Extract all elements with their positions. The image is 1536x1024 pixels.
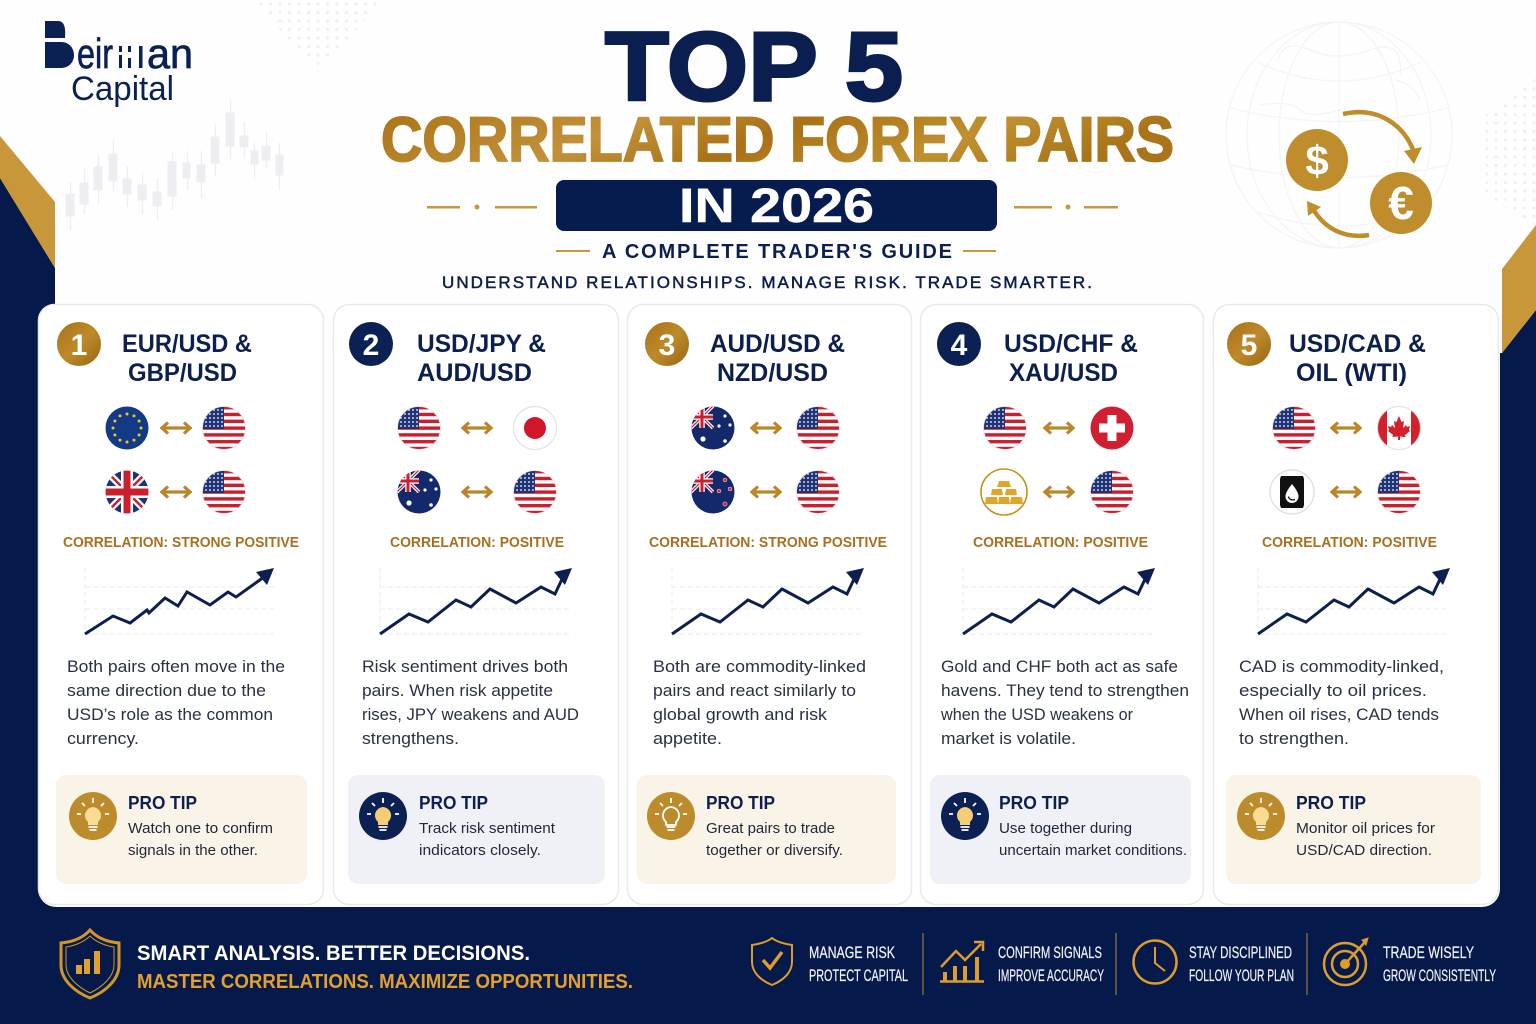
icon: rising bars xyxy=(940,942,984,982)
card heading xyxy=(710,330,845,387)
dot pattern right xyxy=(1486,78,1536,226)
number badge 2: 2 xyxy=(363,329,379,362)
icon: shield check xyxy=(752,938,792,985)
correlation label: CORRELATION: POSITIVE xyxy=(390,535,564,551)
pro tip: Monitor oil prices for xyxy=(1296,821,1435,837)
number badge 4: 4 xyxy=(951,329,968,362)
description: especially to oil prices. xyxy=(1239,682,1427,700)
flags: USD and JPY xyxy=(397,406,556,450)
pro tip xyxy=(1226,775,1481,884)
guide heading: A COMPLETE TRADER'S GUIDE xyxy=(602,241,952,263)
pro tip: PRO TIP xyxy=(419,793,488,813)
panel: card 3 xyxy=(628,304,912,904)
description xyxy=(362,658,579,748)
pro tip: Watch one to confirm xyxy=(128,821,273,837)
panel: card 5 xyxy=(1214,304,1498,904)
tagline: UNDERSTAND RELATIONSHIPS. MANAGE RISK. TRADE SMARTER. xyxy=(442,273,1092,292)
panel: card 1 xyxy=(38,304,324,904)
description xyxy=(1239,658,1444,748)
icon: clock xyxy=(1134,940,1176,984)
description: currency. xyxy=(67,730,139,748)
card heading xyxy=(122,330,252,387)
logo: Beirilian Capital: an xyxy=(147,30,193,77)
flags: EUR and USD xyxy=(106,406,246,450)
description: Risk sentiment drives both xyxy=(362,658,568,676)
flags: NZD and USD xyxy=(691,470,840,514)
card heading: GBP/USD xyxy=(128,359,237,387)
logo: Beirilian Capital: Capital xyxy=(71,70,174,108)
pro tip: Track risk sentiment xyxy=(419,821,555,837)
right navy side band xyxy=(1496,310,1536,1024)
flags: GBP and USD xyxy=(105,470,246,514)
description: global growth and risk xyxy=(653,706,828,724)
pro tip: Great pairs to trade xyxy=(706,821,835,837)
card heading: NZD/USD xyxy=(717,359,828,387)
icon: currency exchange xyxy=(1286,112,1432,236)
card heading: AUD/USD xyxy=(417,359,532,387)
icon: euro coin: € xyxy=(1388,177,1414,229)
card heading xyxy=(1289,330,1426,387)
card heading xyxy=(417,330,546,387)
description: CAD is commodity-linked, xyxy=(1239,658,1444,676)
cards container xyxy=(38,304,1500,907)
pro tip: indicators closely. xyxy=(419,843,541,859)
pro tip: USD/CAD direction. xyxy=(1296,843,1432,859)
pro tip: signals in the other. xyxy=(128,843,258,859)
footer item: confirm signals: CONFIRM SIGNALS xyxy=(998,943,1102,962)
arrow: euro to dollar xyxy=(1307,201,1369,236)
footer item: manage risk: MANAGE RISK xyxy=(809,943,895,962)
pro tip: PRO TIP xyxy=(999,793,1069,813)
description xyxy=(67,658,285,748)
pro tip: uncertain market conditions. xyxy=(999,843,1187,859)
decorative rule right xyxy=(1014,204,1118,210)
footer item: stay disciplined xyxy=(1134,940,1294,985)
flags: USD and CAD xyxy=(1272,406,1421,450)
number badge 5 xyxy=(1227,322,1271,366)
pro tip: Use together during xyxy=(999,821,1132,837)
number badge 3: 3 xyxy=(659,329,675,362)
pro tip xyxy=(637,775,896,884)
line chart xyxy=(963,568,1155,634)
icon: target xyxy=(1324,938,1368,985)
card heading: USD/JPY & xyxy=(417,330,546,358)
description: rises, JPY weakens and AUD xyxy=(362,706,579,724)
icon: footer shield xyxy=(61,930,119,998)
correlation label: CORRELATION: POSITIVE xyxy=(973,535,1148,551)
pro tip: PRO TIP xyxy=(1296,793,1366,813)
footer slogan xyxy=(137,942,633,993)
flags: USD and CHF xyxy=(983,406,1134,450)
footer item: stay disciplined: STAY DISCIPLINED xyxy=(1189,943,1292,962)
flags: AUD and USD xyxy=(691,406,840,450)
description: appetite. xyxy=(653,730,722,748)
card heading: AUD/USD & xyxy=(710,330,845,358)
description: Gold and CHF both act as safe xyxy=(941,658,1178,676)
icons: gold and USD xyxy=(981,469,1134,515)
description xyxy=(940,658,1189,748)
description: USD’s role as the common xyxy=(67,706,273,724)
subtitle: correlated forex pairs: CORRELATED FOREX PAIRS xyxy=(381,105,1174,175)
description: strengthens. xyxy=(362,730,459,748)
footer slogan: SMART ANALYSIS. BETTER DECISIONS. xyxy=(137,942,530,965)
number badge 4 xyxy=(937,322,981,366)
card heading xyxy=(1004,330,1138,387)
footer item: manage risk: PROTECT CAPITAL xyxy=(809,966,908,985)
panel: card 2 xyxy=(334,304,618,904)
card heading: USD/CHF & xyxy=(1004,330,1138,358)
icon: dollar coin xyxy=(1286,129,1348,191)
logo: Beirilian Capital xyxy=(45,21,193,108)
number badge 1: 1 xyxy=(71,329,87,362)
line chart xyxy=(380,568,572,634)
footer item: confirm signals: IMPROVE ACCURACY xyxy=(998,966,1104,985)
footer item: trade wisely: TRADE WISELY xyxy=(1383,943,1474,962)
background candlestick chart xyxy=(66,99,283,230)
pro tip: PRO TIP xyxy=(706,793,775,813)
description: market is volatile. xyxy=(941,730,1076,748)
dot pattern top xyxy=(253,0,384,72)
pro tip: PRO TIP xyxy=(128,793,197,813)
description: Both pairs often move in the xyxy=(67,658,285,676)
correlation label: CORRELATION: POSITIVE xyxy=(1262,535,1437,551)
icon: dollar coin: $ xyxy=(1305,137,1329,184)
year pill: in 2026 xyxy=(556,180,997,233)
number badge 2 xyxy=(349,322,393,366)
right gold accent xyxy=(1502,225,1536,353)
card heading: XAU/USD xyxy=(1009,359,1118,387)
description: pairs and react similarly to xyxy=(653,682,856,700)
title: TOP 5: TOP 5 xyxy=(605,12,903,121)
description xyxy=(653,658,866,748)
card heading: OIL (WTI) xyxy=(1296,359,1407,387)
line chart xyxy=(85,568,275,634)
description: when the USD weakens or xyxy=(940,706,1133,724)
arrow: dollar to euro xyxy=(1343,112,1422,164)
left gold accent xyxy=(0,136,55,268)
footer item: confirm signals xyxy=(940,942,1104,985)
description: to strengthen. xyxy=(1239,730,1349,748)
line chart xyxy=(1258,568,1450,634)
icons: oil and USD xyxy=(1270,470,1421,514)
left navy side band xyxy=(0,178,55,1024)
pro tip xyxy=(930,775,1191,884)
card heading: USD/CAD & xyxy=(1289,330,1426,358)
description: pairs. When risk appetite xyxy=(362,682,553,700)
line chart xyxy=(672,568,864,634)
decorative rule left xyxy=(427,204,537,210)
footer item: trade wisely xyxy=(1324,938,1496,985)
pro tip: together or diversify. xyxy=(706,843,843,859)
pro tip xyxy=(56,775,307,884)
icon: euro coin xyxy=(1370,172,1432,234)
logo: Beirilian Capital: eir xyxy=(77,30,113,77)
footer item: stay disciplined: FOLLOW YOUR PLAN xyxy=(1189,966,1294,985)
number badge 5: 5 xyxy=(1241,329,1257,362)
number badge 1 xyxy=(57,322,101,366)
correlation label: CORRELATION: STRONG POSITIVE xyxy=(63,535,299,551)
footer band xyxy=(0,890,1536,1024)
panel: card 4 xyxy=(920,304,1204,904)
description: same direction due to the xyxy=(67,682,266,700)
card heading: EUR/USD & xyxy=(122,330,252,358)
year pill: in 2026: IN 2026 xyxy=(679,180,874,233)
number badge 3 xyxy=(645,322,689,366)
flags: AUD and USD xyxy=(397,470,557,514)
description: havens. They tend to strengthen xyxy=(941,682,1189,700)
description: Both are commodity-linked xyxy=(653,658,866,676)
background globe xyxy=(1226,22,1452,248)
footer item: manage risk xyxy=(752,938,908,985)
footer slogan: MASTER CORRELATIONS. MAXIMIZE OPPORTUNITIES. xyxy=(137,971,633,993)
pro tip xyxy=(348,775,605,884)
description: When oil rises, CAD tends xyxy=(1239,706,1439,724)
correlation label: CORRELATION: STRONG POSITIVE xyxy=(649,535,887,551)
